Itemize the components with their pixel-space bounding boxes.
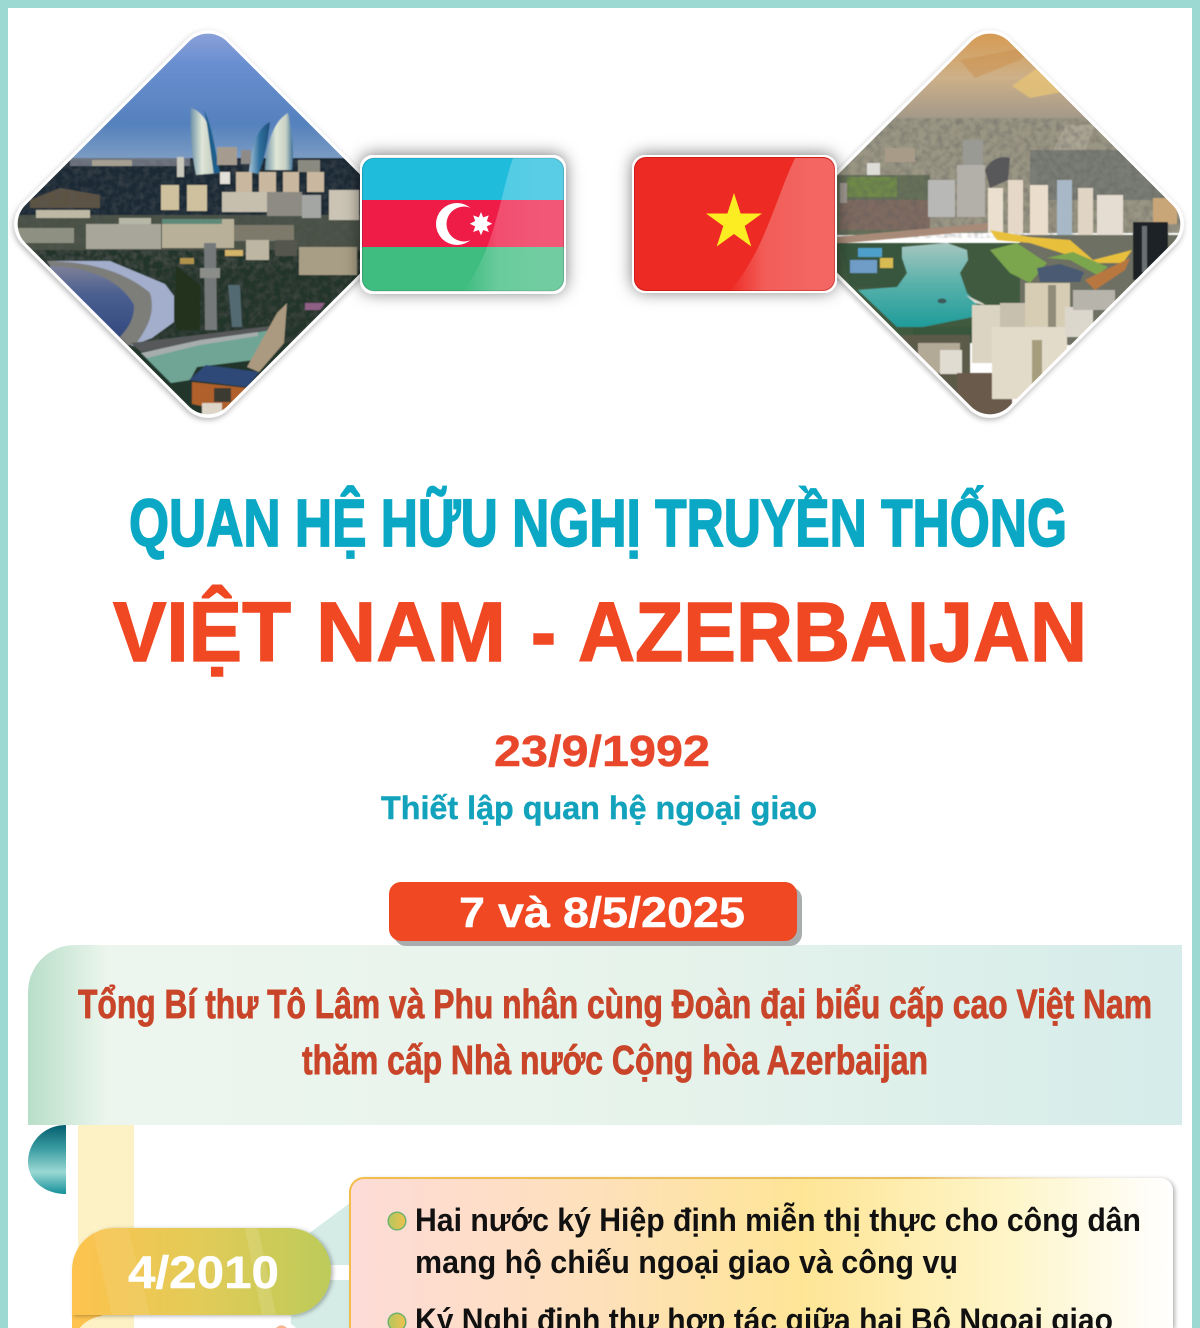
date badge: visit (389, 882, 802, 946)
event 1 line 1: Hai nước ký Hiệp định miễn thị thực cho công dân (415, 1202, 1141, 1238)
panel: 4/2010 events (350, 1178, 1173, 1328)
ribbon fold (28, 1125, 66, 1194)
caption: diplomatic relations: Thiết lập quan hệ ngoại giao (381, 790, 817, 826)
date badge: 4/2010 (72, 1228, 331, 1315)
date badge: 4/2010: 4/2010 (128, 1247, 279, 1298)
event 1 line 2: mang hộ chiếu ngoại giao và công vụ (415, 1244, 958, 1280)
title: country names: - (531, 585, 556, 679)
date: established: 23/9/1992 (494, 727, 710, 776)
timeline band (78, 1125, 134, 1328)
banner ribbon (28, 945, 1182, 1125)
title: country names: AZERBAIJAN (578, 585, 1087, 679)
ribbon text line 2: thăm cấp Nhà nước Cộng hòa Azerbaijan (302, 1037, 928, 1083)
flag: Vietnam (632, 155, 837, 293)
date badge: visit: 7 và 8/5/2025 (459, 889, 745, 937)
photo: Hanoi skyline (836, 29, 1186, 423)
bullet 1 (388, 1212, 406, 1230)
title: country names: VIỆT (113, 585, 291, 679)
connector (290, 1203, 351, 1328)
flag: Azerbaijan (360, 155, 566, 294)
next timeline badge (72, 1300, 296, 1328)
photo: Baku skyline (10, 29, 360, 423)
bullet 2 (388, 1313, 406, 1328)
title: country names: NAM (316, 585, 506, 679)
